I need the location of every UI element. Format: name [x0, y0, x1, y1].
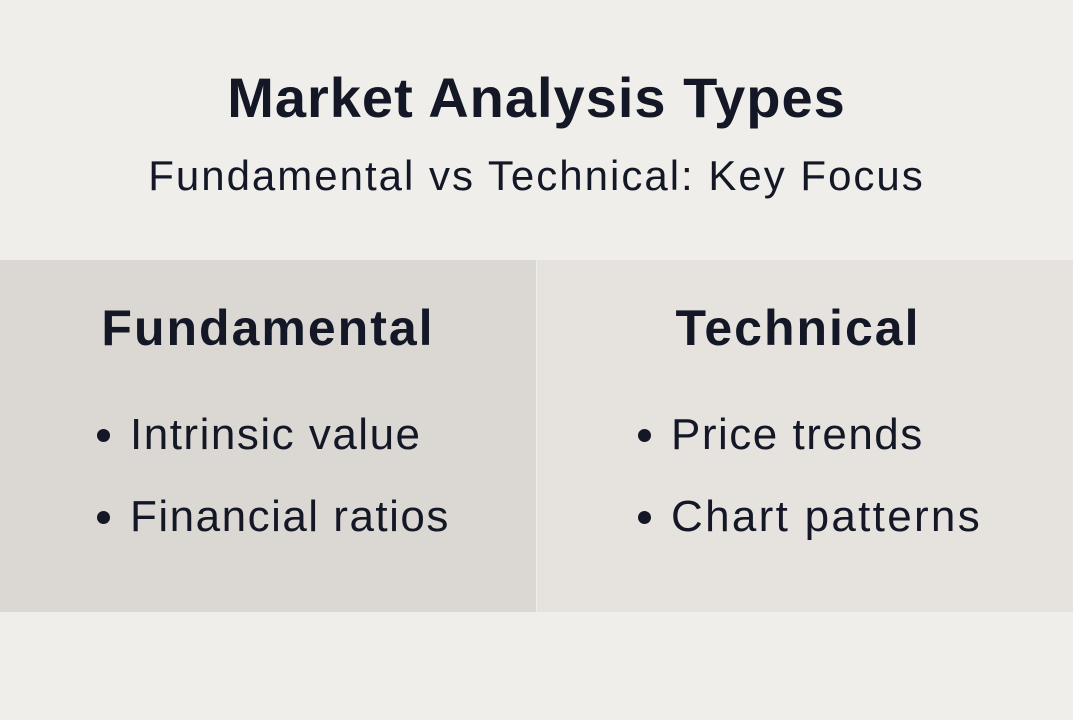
- bullet: financial ratios: Financial ratios: [130, 492, 450, 541]
- title: Market Analysis Types: [227, 66, 846, 129]
- bullet: price trends: Price trends: [671, 410, 924, 459]
- heading: technical: Technical: [676, 300, 920, 356]
- subtitle: Fundamental vs Technical: Key Focus: [148, 152, 925, 199]
- panel: fundamental: [0, 260, 536, 612]
- panel: technical: [537, 260, 1073, 612]
- bullet: chart patterns: Chart patterns: [671, 492, 982, 541]
- heading: fundamental: Fundamental: [101, 300, 435, 356]
- bullet: intrinsic value: Intrinsic value: [130, 410, 422, 459]
